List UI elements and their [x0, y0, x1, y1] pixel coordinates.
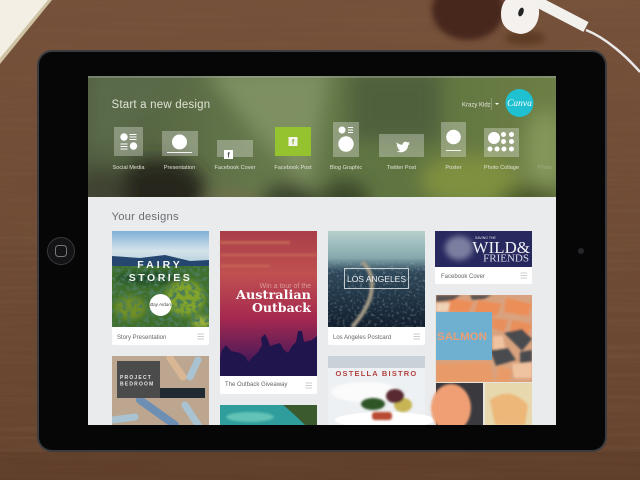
- design type: facebook cover: [214, 140, 256, 171]
- card: the outback giveaway: [220, 231, 317, 394]
- design type: twitter post: [379, 134, 424, 171]
- card: project bedroom: [112, 356, 209, 425]
- heading: start a new design: Start a new design: [112, 99, 210, 111]
- design type: facebook cover: Facebook Cover: [214, 165, 256, 171]
- card: facebook cover: FRIENDS: [483, 252, 529, 264]
- card: facebook cover: [435, 231, 532, 284]
- card: the outback giveaway: The Outback Giveaway: [225, 382, 287, 388]
- card: project bedroom: PROJECT: [120, 375, 152, 381]
- card: the outback giveaway: Australian: [235, 287, 311, 302]
- card: salmon: SALMON: [437, 331, 487, 343]
- design type: photo collage: [484, 128, 519, 171]
- design type: presentation: [162, 131, 198, 171]
- design type: facebook post: [274, 127, 312, 171]
- design type: facebook cover: f: [227, 152, 230, 160]
- tablet body: [37, 50, 607, 452]
- card: los angeles postcard: Los Angeles Postcard: [333, 335, 391, 341]
- card: story presentation: FAIRY: [137, 259, 183, 271]
- card: the outback giveaway: Win a tour of the: [260, 283, 311, 290]
- card: ostella bistro: [328, 356, 435, 428]
- design type: blog graphic: [330, 122, 362, 171]
- card: the outback giveaway: Outback: [252, 300, 311, 315]
- card: facebook cover: SAVING THE: [475, 236, 497, 240]
- logo: Canva: [506, 89, 534, 117]
- design type: blog graphic: Blog Graphic: [330, 165, 362, 171]
- card: story presentation: Story Presentation: [117, 335, 166, 341]
- card: facebook cover: WILD&: [472, 238, 530, 257]
- design type: poster: [441, 122, 466, 171]
- design type: social media: [112, 127, 145, 171]
- logo: Canva: Canva: [507, 99, 532, 109]
- front camera: [578, 248, 584, 254]
- faded next label: Photo: [538, 165, 553, 171]
- card: story presentation: [112, 231, 212, 345]
- card: story presentation: Bay Ardan: [150, 302, 171, 307]
- card: story presentation: STORIES: [129, 272, 192, 284]
- header panel: [88, 76, 556, 197]
- earphone: [501, 0, 640, 72]
- card: teal coast: [220, 405, 317, 425]
- design type: facebook post: f: [292, 140, 295, 146]
- card: salmon: [431, 295, 532, 432]
- card: los angeles postcard: [328, 231, 425, 345]
- design type: presentation: Presentation: [164, 165, 195, 171]
- card: los angeles postcard: LOS ANGELES: [347, 274, 406, 284]
- card: ostella bistro: OSTELLA BISTRO: [336, 369, 417, 378]
- account name: Krazy Kidz: [462, 102, 491, 108]
- design type: social media: Social Media: [112, 165, 145, 171]
- design type: poster: Poster: [445, 165, 462, 171]
- design type: photo collage: Photo Collage: [484, 165, 519, 171]
- notebook corner: [0, 0, 52, 64]
- design type: twitter post: Twitter Post: [387, 165, 417, 171]
- app screen: [74, 70, 565, 432]
- design type: facebook post: Facebook Post: [274, 165, 312, 171]
- home button: [48, 238, 74, 264]
- account name: [462, 98, 499, 110]
- card: facebook cover: Facebook Cover: [441, 274, 485, 280]
- card: project bedroom: BEDROOM: [120, 382, 155, 388]
- heading: your designs: Your designs: [112, 211, 179, 223]
